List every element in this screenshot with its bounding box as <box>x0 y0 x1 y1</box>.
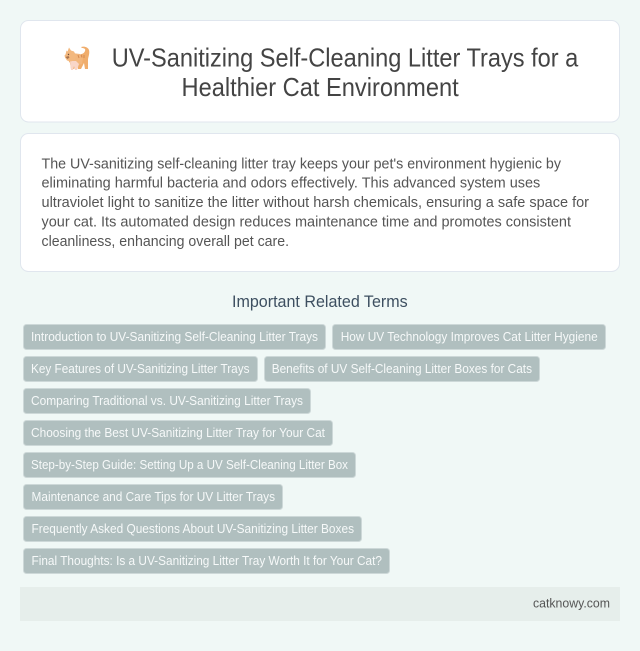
tag: benefits <box>264 356 540 382</box>
panel: title card <box>20 20 620 122</box>
tag: key features <box>24 356 258 382</box>
tag: final thoughts: Final Thoughts: Is a UV-Sanitizing Litter Tray Worth It for Your Cat? <box>32 553 382 568</box>
tag: comparing <box>24 388 310 414</box>
title text: Healthier Cat Environment <box>182 74 459 102</box>
tag: choosing: Choosing the Best UV-Sanitizing Litter Tray for Your Cat <box>31 425 325 440</box>
description text <box>42 156 589 250</box>
tag: benefits: Benefits of UV Self-Cleaning Litter Boxes for Cats <box>272 361 532 376</box>
tag: maintenance: Maintenance and Care Tips for UV Litter Trays <box>32 489 275 504</box>
tag: introduction: Introduction to UV-Sanitizing Self-Cleaning Litter Trays <box>31 329 318 344</box>
tag: step-by-step: Step-by-Step Guide: Setting Up a UV Self-Cleaning Litter Box <box>31 457 349 472</box>
panel: description card <box>20 134 620 272</box>
tag: how UV technology: How UV Technology Improves Cat Litter Hygiene <box>341 329 598 344</box>
tag: maintenance <box>24 484 282 510</box>
tag: comparing: Comparing Traditional vs. UV-Sanitizing Litter Trays <box>31 393 303 408</box>
tag: final thoughts <box>24 548 390 574</box>
footer bar <box>20 587 620 621</box>
tag: FAQ <box>24 516 362 542</box>
tag: key features: Key Features of UV-Sanitizing Litter Trays <box>31 361 250 376</box>
description text: your cat. Its automated design reduces maintenance time and promotes consistent <box>42 214 571 230</box>
title text <box>112 45 579 102</box>
description text: ultraviolet light to sanitize the litter without harsh chemicals, ensuring a safe space for <box>42 195 589 211</box>
description text: The UV-sanitizing self-cleaning litter tray keeps your pet's environment hygienic by <box>42 156 562 172</box>
description text: cleanliness, enhancing overall pet care. <box>42 234 289 250</box>
tag: introduction <box>24 324 326 350</box>
title text: UV-Sanitizing Self-Cleaning Litter Trays for a <box>112 45 579 73</box>
footer text: catknowy.com <box>533 597 610 611</box>
heading: important related terms: Important Related Terms <box>232 292 408 311</box>
description text: eliminating harmful bacteria and odors effectively. This advanced system uses <box>42 176 540 192</box>
icon: cat <box>64 47 89 70</box>
tag: step-by-step <box>24 452 356 478</box>
tag list <box>24 324 606 574</box>
tag: choosing <box>24 420 332 446</box>
tag: FAQ: Frequently Asked Questions About UV-Sanitizing Litter Boxes <box>32 521 354 536</box>
tag: how UV technology <box>332 324 606 350</box>
